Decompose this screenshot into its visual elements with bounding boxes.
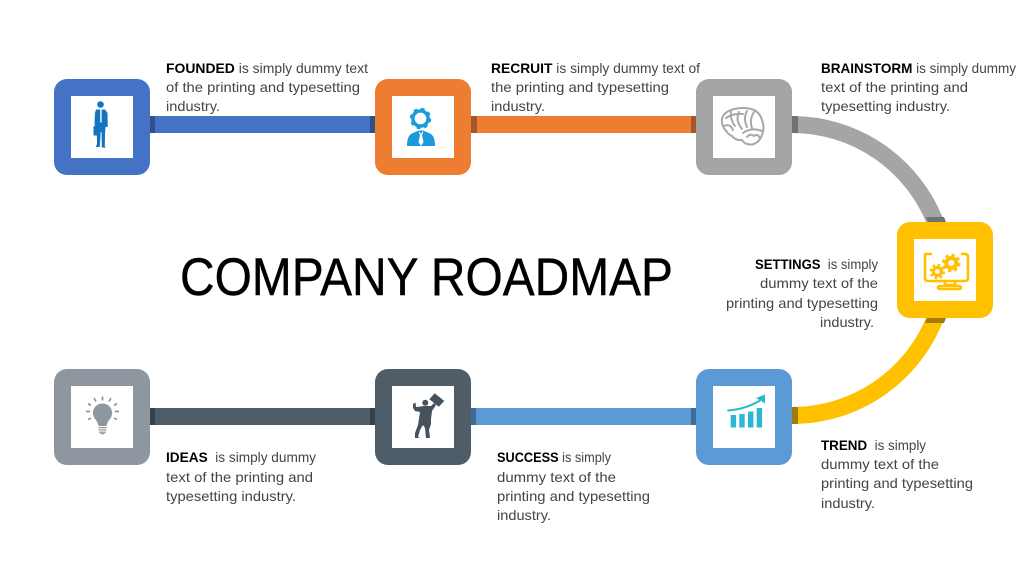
panel: success box	[375, 369, 471, 465]
text block: settings: printing and typesetting	[726, 295, 878, 311]
text block: recruit	[491, 60, 700, 114]
text block: trend: TREND is simply	[821, 437, 926, 453]
text block: settings: industry.	[820, 314, 874, 330]
text block: recruit: industry.	[491, 98, 545, 114]
text block: brainstorm: BRAINSTORM is simply dummy	[821, 60, 1016, 76]
panel: recruit box	[375, 79, 471, 175]
icon: businessman with briefcase	[94, 101, 108, 148]
panel: brainstorm box	[696, 79, 792, 175]
connector: recruit to brainstorm	[471, 116, 696, 133]
text block: founded: of the printing and typesetting	[166, 79, 360, 95]
text block: recruit: RECRUIT is simply dummy text of	[491, 60, 700, 76]
text block: success: industry.	[497, 507, 551, 523]
text block: trend: printing and typesetting	[821, 475, 973, 491]
text block: founded: industry.	[166, 98, 220, 114]
text block: settings: SETTINGS is simply	[755, 256, 878, 272]
icon: growth chart	[727, 394, 765, 428]
panel: founded box	[54, 79, 150, 175]
text block: recruit: the printing and typesetting	[491, 79, 669, 95]
text block: success: SUCCESS is simply	[497, 449, 611, 465]
text block: success: dummy text of the	[497, 469, 616, 485]
icon: person with gear head	[407, 109, 435, 146]
text block: trend	[821, 437, 973, 511]
connector: brainstorm to settings arc	[792, 116, 946, 224]
text block: ideas: IDEAS is simply dummy	[166, 449, 316, 465]
connector: trend to success	[471, 408, 696, 425]
connector: founded to recruit	[150, 116, 375, 133]
text block: brainstorm: text of the printing and	[821, 79, 968, 95]
text block: ideas: text of the printing and	[166, 469, 313, 485]
icon: monitor with gears	[925, 254, 968, 289]
text block: brainstorm: typesetting industry.	[821, 98, 950, 114]
text block: success	[497, 449, 650, 523]
text block: ideas: typesetting industry.	[166, 488, 296, 504]
panel: trend box	[696, 369, 792, 465]
connector: settings to trend arc	[792, 316, 946, 424]
text block: brainstorm	[821, 60, 1016, 114]
text block: settings: dummy text of the	[760, 275, 878, 291]
panel: ideas box	[54, 369, 150, 465]
text block: trend: industry.	[821, 495, 875, 511]
text block: founded: FOUNDED is simply dummy text	[166, 60, 368, 76]
icon: brain	[722, 108, 764, 145]
text block: trend: dummy text of the	[821, 456, 939, 472]
icon: celebrating man with document	[413, 393, 444, 438]
title: COMPANY ROADMAP	[180, 248, 673, 307]
text block: founded	[166, 60, 368, 114]
connector: success to ideas	[150, 408, 375, 425]
panel: settings box	[897, 222, 993, 318]
text block: settings	[726, 256, 878, 330]
icon: light bulb	[86, 396, 119, 434]
text block: ideas	[166, 449, 316, 504]
text block: success: printing and typesetting	[497, 488, 650, 504]
